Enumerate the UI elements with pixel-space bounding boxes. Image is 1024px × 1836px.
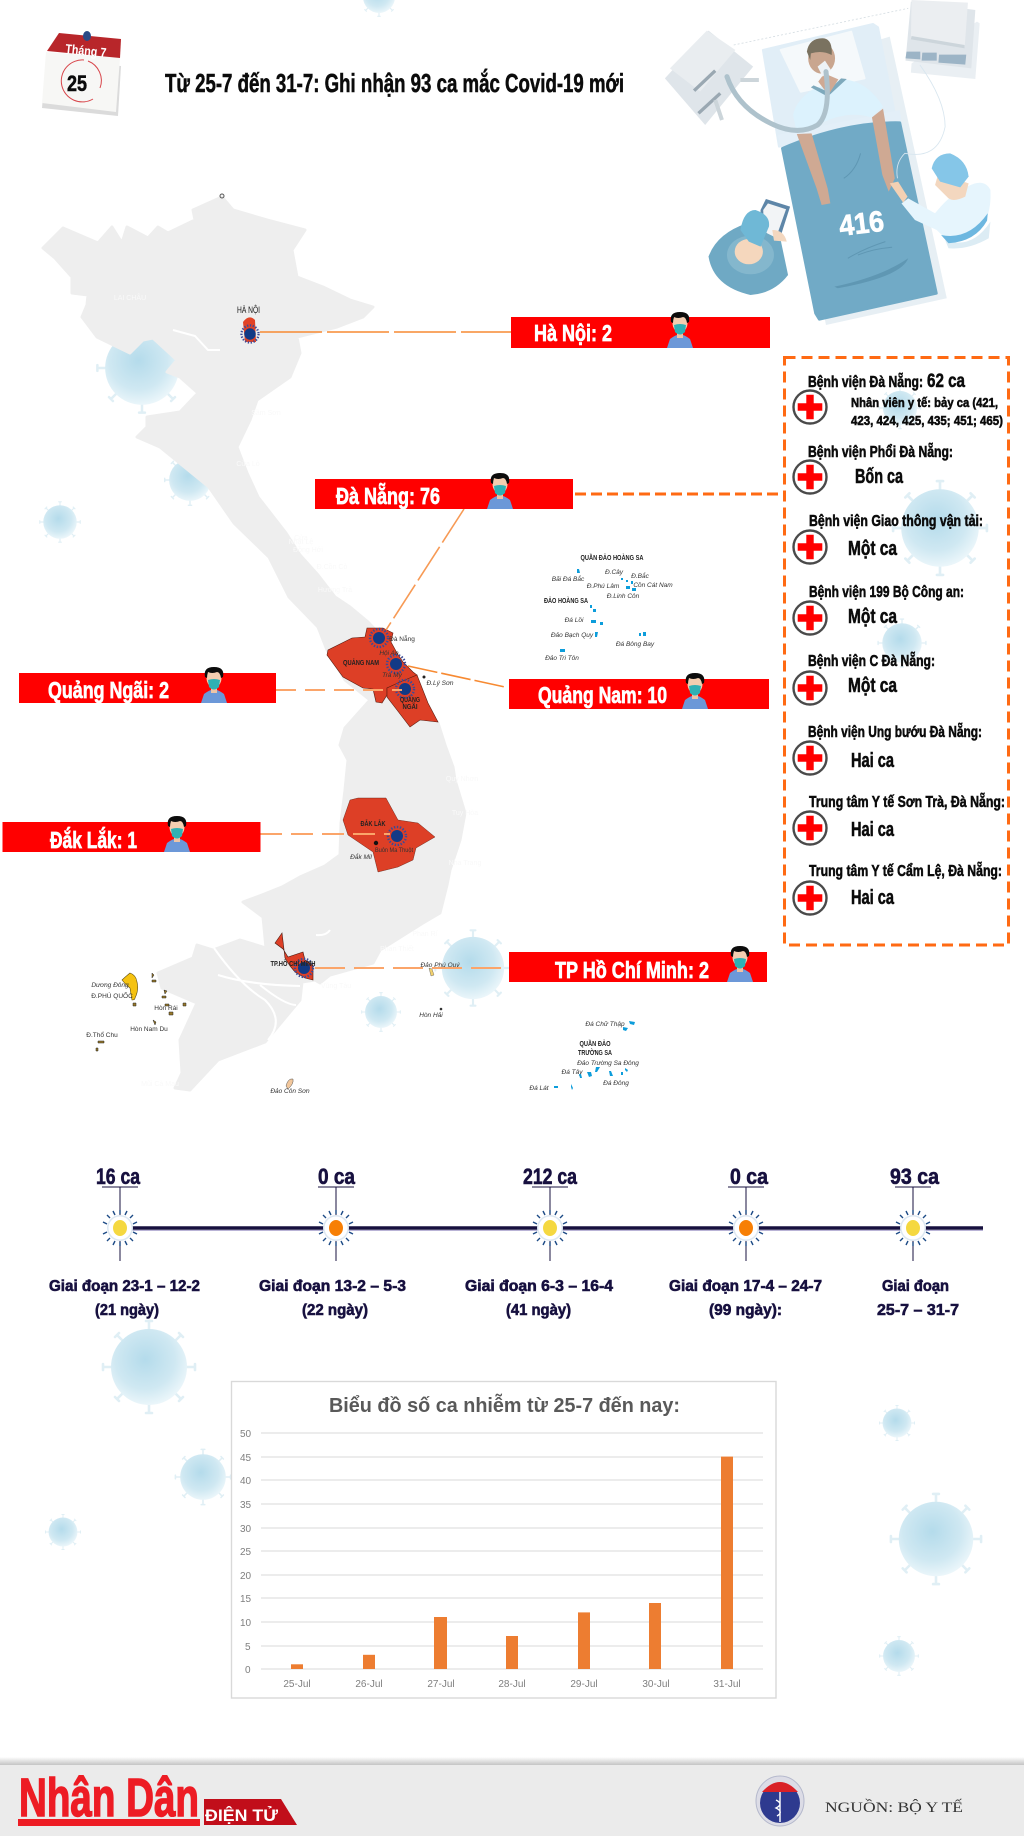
chart title: Biểu đồ số ca nhiễm từ 25-7 đến nay: [329, 1393, 680, 1417]
y axis labels: 0 [245, 1665, 251, 1676]
x axis labels: 25-Jul [283, 1679, 311, 1690]
logo: Nhân Dân điện tử: ĐIỆN TỬ [205, 1806, 279, 1825]
label: Quảng Nam [509, 673, 769, 709]
Hoàng Sa archipelago: Đá Lồi [565, 615, 584, 624]
faint place names: Cửa Lò [236, 460, 260, 468]
Hoàng Sa archipelago: QUẦN ĐẢO HOÀNG SA [580, 552, 644, 562]
hospital: Đà Nẵng: 423, 424, 425, 435; 451; 465) [851, 413, 1003, 428]
dashed cable [734, 8, 908, 45]
Hoàng Sa archipelago: Bãi Đá Bắc [552, 574, 585, 583]
logo: Nhân Dân điện tử: Nhân Dân [19, 1768, 199, 1828]
Phú Quốc island [122, 973, 138, 1000]
decorative virus: west small [40, 502, 80, 542]
bed number: 416 [837, 205, 886, 243]
decorative virus: top edge [360, 0, 398, 16]
timeline stop: 23-1 to 12-2: (21 ngày) [95, 1302, 159, 1319]
timeline stop: 25-7 to 31-7: 93 ca [890, 1164, 940, 1189]
label: Quảng Nam: Quảng Nam: 10 [538, 682, 667, 708]
label: Đà Nẵng: Đà Nẵng: 76 [336, 482, 440, 509]
centre: Sơn Trà: Hai ca [851, 819, 895, 841]
faint place names: Tuy Hòa [452, 810, 478, 817]
x axis labels: 26-Jul [355, 1679, 383, 1690]
mainland silhouette [43, 197, 465, 1090]
southern islands and labels: Hòn Nam Du [130, 1026, 168, 1033]
hospital: Đà Nẵng: Nhân viên y tế: bảy ca (421, [851, 395, 998, 410]
Hà Nội highlight: HÀ NỘI [237, 305, 260, 315]
timeline stop: 13-2 to 5-3: 0 ca [318, 1164, 356, 1189]
decorative virus: left of chart large [103, 1321, 195, 1413]
Hoàng Sa archipelago: Đ.Cây [605, 569, 624, 576]
logo: Bộ Y tế emblem [756, 1776, 804, 1826]
Hoàng Sa archipelago: Đảo Tri Tôn [545, 654, 579, 662]
timeline stop: 6-3 to 16-4 [465, 1164, 613, 1319]
oxygen mask [818, 61, 831, 77]
hospital: 199 Bộ Công an [794, 584, 964, 634]
label: TP Hồ Chí Minh [509, 946, 767, 983]
decorative virus: left of chart small [46, 1515, 80, 1549]
pillow [781, 32, 865, 92]
patient head [818, 73, 838, 95]
y axis labels: 5 [245, 1642, 251, 1653]
province labels: ĐẮK LẮK [360, 819, 386, 828]
connector: Quảng Ngãi [276, 689, 402, 691]
faint place names: Quy Nhơn [446, 776, 478, 783]
faint place names: Phan Rí [412, 931, 438, 938]
hospital: 199 Bộ Công an: Một ca [848, 606, 898, 628]
southern islands and labels: Đ.Thổ Chu [86, 1031, 118, 1039]
province labels: QUẢNG NAM [343, 658, 379, 667]
outbreak markers [295, 629, 414, 977]
timeline stop: 25-7 to 31-7: 25-7 – 31-7 [877, 1302, 959, 1319]
southern islands and labels: Đảo Côn Sơn [270, 1087, 310, 1095]
decorative virus: right of chart large [891, 1494, 981, 1584]
timeline stop: 13-2 to 5-3: Giai đoạn 13-2 – 5-3 [259, 1278, 406, 1295]
timeline stop: 23-1 to 12-2 [49, 1164, 200, 1319]
y axis labels: 15 [240, 1594, 252, 1605]
timeline stop: 6-3 to 16-4: Giai đoạn 6-3 – 16-4 [465, 1278, 613, 1295]
connector: Quảng Nam [408, 666, 505, 687]
hospital: C Đà Nẵng: Bệnh viện C Đà Nẵng: [808, 650, 935, 670]
rivers and lake [173, 330, 330, 1040]
decorative virus: south sea large [435, 930, 511, 1006]
centre: Sơn Trà [794, 791, 1005, 844]
Hoàng Sa archipelago: Đ.Bắc [631, 571, 650, 580]
calendar icon [42, 31, 121, 116]
hospital: Phổi Đà Nẵng: Bốn ca [855, 466, 904, 488]
province labels: Buôn Ma Thuột [375, 847, 413, 854]
y axis labels: 20 [240, 1571, 252, 1582]
Quảng Ngãi province [387, 675, 438, 727]
Trường Sa archipelago: TRƯỜNG SA [578, 1048, 612, 1057]
southern islands and labels: Dương Đông [91, 982, 129, 989]
province labels: Trà My [382, 672, 403, 679]
x axis labels: 29-Jul [570, 1679, 598, 1690]
southern islands and labels [86, 961, 460, 1095]
ventilator [665, 31, 753, 125]
connector: Đà Nẵng to hospital panel [575, 492, 784, 496]
southern islands and labels: Hòn Rái [154, 1005, 178, 1012]
Trường Sa archipelago: Đá Chữ Thập [585, 1021, 625, 1028]
hospital: Giao thông vận tải: Một ca [848, 538, 898, 560]
timeline stop: 6-3 to 16-4: 212 ca [523, 1164, 578, 1189]
connector: TP Hồ Chí Minh [315, 967, 509, 969]
province labels: NGÃI [402, 702, 418, 711]
label: Đà Nẵng [315, 473, 573, 509]
Hoàng Sa archipelago: Đ.Phú Lâm [587, 583, 620, 590]
chart grid lines [261, 1433, 763, 1669]
blanket fold [778, 110, 902, 147]
label: Quảng Ngãi: Quảng Ngãi: 2 [48, 677, 169, 703]
timeline stop: 17-4 to 24-7: Giai đoạn 17-4 – 24-7 [669, 1278, 822, 1295]
x axis labels: 28-Jul [498, 1679, 526, 1690]
faint place names: Nhật Lệ [289, 539, 313, 546]
timeline stop: 23-1 to 12-2: Giai đoạn 23-1 – 12-2 [49, 1278, 200, 1295]
TP Hồ Chí Minh [275, 933, 313, 980]
timeline [49, 1164, 983, 1319]
decorative virus: right of chart top [880, 1406, 914, 1440]
faint place names: Hương Trà [318, 587, 352, 594]
label: Hà Nội [511, 312, 770, 348]
hospital: Phổi Đà Nẵng: Bệnh viện Phổi Đà Nẵng: [808, 441, 953, 461]
timeline stop: 6-3 to 16-4: (41 ngày) [506, 1302, 571, 1319]
Hà Nội highlight [237, 305, 260, 343]
Hoàng Sa archipelago [544, 552, 673, 662]
breathing tube [727, 72, 827, 130]
hospital: Ung bướu Đà Nẵng: Hai ca [851, 750, 895, 772]
IV line [897, 65, 945, 178]
bed mattress [763, 24, 895, 147]
decorative virus: right of chart bottom [880, 1637, 918, 1675]
hospital: Phổi Đà Nẵng [794, 441, 953, 494]
Trường Sa archipelago: Đảo Trường Sa Đông [577, 1059, 639, 1067]
Hoàng Sa archipelago: Đảo Bạch Quy [551, 631, 594, 639]
patient gown [793, 79, 883, 129]
x axis labels: 31-Jul [713, 1679, 741, 1690]
patient arms [797, 133, 830, 205]
Đắk Lắk province [343, 798, 435, 872]
calendar icon: Tháng 7 [65, 41, 107, 60]
x axis labels [283, 1679, 741, 1690]
decorative virus: left of chart medium [175, 1449, 231, 1505]
faint place names: Nha Trang [449, 860, 481, 867]
Trường Sa archipelago: QUẦN ĐẢO [580, 1038, 611, 1048]
faint place names [114, 293, 481, 1088]
calendar icon: 25 [67, 71, 87, 96]
hospital: Đà Nẵng: Bệnh viện Đà Nẵng: [808, 371, 923, 391]
illustration: patient in hospital bed [665, 0, 991, 325]
connector: Đà Nẵng to map [386, 509, 464, 630]
decorative virus: behind hospital panel top [879, 387, 921, 429]
province labels: TP.HỒ CHÍ MINH [270, 958, 316, 968]
timeline stop: 17-4 to 24-7 [669, 1164, 822, 1319]
map of Vietnam [43, 194, 673, 1095]
timeline stop: 13-2 to 5-3: (22 ngày) [302, 1302, 368, 1319]
timeline axis [120, 1226, 983, 1230]
y axis labels: 40 [240, 1476, 252, 1487]
hospital: Đà Nẵng [794, 371, 1003, 428]
label: Hà Nội: Hà Nội: 2 [534, 320, 612, 346]
Trường Sa archipelago: Đá Lát [529, 1085, 550, 1092]
Quảng Nam province [327, 628, 417, 703]
connector: Hà Nội [260, 331, 511, 333]
connector: Đắk Lắk [260, 833, 390, 835]
Trường Sa archipelago [529, 1021, 639, 1092]
decorative virus: south sea small [362, 993, 400, 1031]
province labels: Hội An [379, 650, 399, 657]
bar chart [232, 1382, 776, 1698]
Trường Sa archipelago: Đá Tây [562, 1069, 583, 1076]
panel: Đà Nẵng hospitals [784, 358, 1008, 945]
province labels: Đắk Mil [350, 852, 372, 861]
y axis labels: 25 [240, 1547, 252, 1558]
centre: Cẩm Lệ [794, 860, 1002, 914]
faint place names: Đồng Hới [293, 545, 323, 554]
hospital: 199 Bộ Công an: Bệnh viện 199 Bộ Công an: [809, 584, 964, 601]
timeline stop: 25-7 to 31-7: Giai đoạn [882, 1278, 949, 1295]
footer [0, 1757, 1024, 1836]
hospital: Đà Nẵng: 62 ca [927, 371, 965, 392]
y axis labels [240, 1429, 252, 1676]
Trường Sa archipelago: Đá Đông [603, 1080, 629, 1087]
label: Quảng Ngãi [19, 667, 276, 703]
source text: NGUỒN: BỘ Y TẾ [825, 1798, 963, 1816]
province labels: QUẢNG [400, 695, 420, 704]
y axis labels: 50 [240, 1429, 252, 1440]
bed shadow [824, 37, 947, 325]
province labels: Đà Nẵng [389, 634, 415, 643]
y axis labels: 30 [240, 1524, 252, 1535]
timeline stop: 13-2 to 5-3 [259, 1164, 406, 1319]
hospital: C Đà Nẵng: Một ca [848, 675, 898, 697]
Hoàng Sa archipelago: Cồn Cát Nam [633, 580, 673, 589]
faint place names: Cửa [294, 534, 308, 542]
y axis labels: 10 [240, 1618, 252, 1629]
province labels: Đ.Lý Sơn [426, 680, 454, 687]
title: Từ 25-7 đến 31-7: Ghi nhận 93 ca mắc Covid-19 mới [165, 68, 624, 98]
faint place names: LAI CHÂU [114, 293, 146, 302]
southern islands and labels: Hòn Hải [419, 1011, 443, 1019]
hospital: C Đà Nẵng [794, 650, 935, 704]
label: Đắk Lắk: Đắk Lắk: 1 [50, 826, 137, 853]
bars [291, 1457, 733, 1669]
timeline stop: 17-4 to 24-7: (99 ngày): [709, 1302, 782, 1319]
decorative virus: north-west of map [97, 323, 187, 413]
Hoàng Sa archipelago: Đá Bông Bay [616, 641, 655, 648]
faint place names: Sầm Sơn [251, 408, 281, 417]
decorative virus: behind hospital panel small [878, 619, 926, 667]
faint place names: Mũi Cà Mau [141, 1081, 179, 1088]
centre: Cẩm Lệ: Hai ca [851, 887, 895, 909]
x axis labels: 30-Jul [642, 1679, 670, 1690]
faint place names: Đ.Cồn Cỏ [317, 562, 347, 571]
Hoàng Sa archipelago: Đ.Linh Côn [607, 593, 640, 600]
decorative virus: central-west of map [165, 455, 215, 505]
Hoàng Sa archipelago: ĐẢO HOÀNG SA [544, 596, 588, 605]
x axis labels: 27-Jul [427, 1679, 455, 1690]
label: TP Hồ Chí Minh: TP Hồ Chí Minh: 2 [555, 957, 709, 983]
blanket [782, 123, 936, 319]
label: Đắk Lắk [2, 816, 260, 853]
southern islands and labels: Đảo Phú Quý [420, 961, 460, 969]
left doctor [761, 199, 790, 247]
province labels [220, 194, 454, 968]
decorative virus: behind hospital panel large [893, 481, 987, 575]
hospital: Giao thông vận tải [794, 513, 983, 564]
y axis labels: 45 [240, 1453, 252, 1464]
faint place names: Phan Thiết [380, 944, 414, 953]
hospital: Ung bướu Đà Nẵng [794, 721, 982, 774]
timeline stop: 23-1 to 12-2: 16 ca [96, 1164, 141, 1189]
y axis labels: 35 [240, 1500, 252, 1511]
timeline stop: 17-4 to 24-7: 0 ca [730, 1164, 769, 1189]
monitor [911, 22, 980, 79]
southern islands and labels: Đ.PHÚ QUỐC [91, 990, 133, 1000]
right doctor [945, 222, 990, 249]
faint place names: Vũng Tàu [321, 983, 351, 990]
timeline stop: 25-7 to 31-7 [877, 1164, 959, 1319]
